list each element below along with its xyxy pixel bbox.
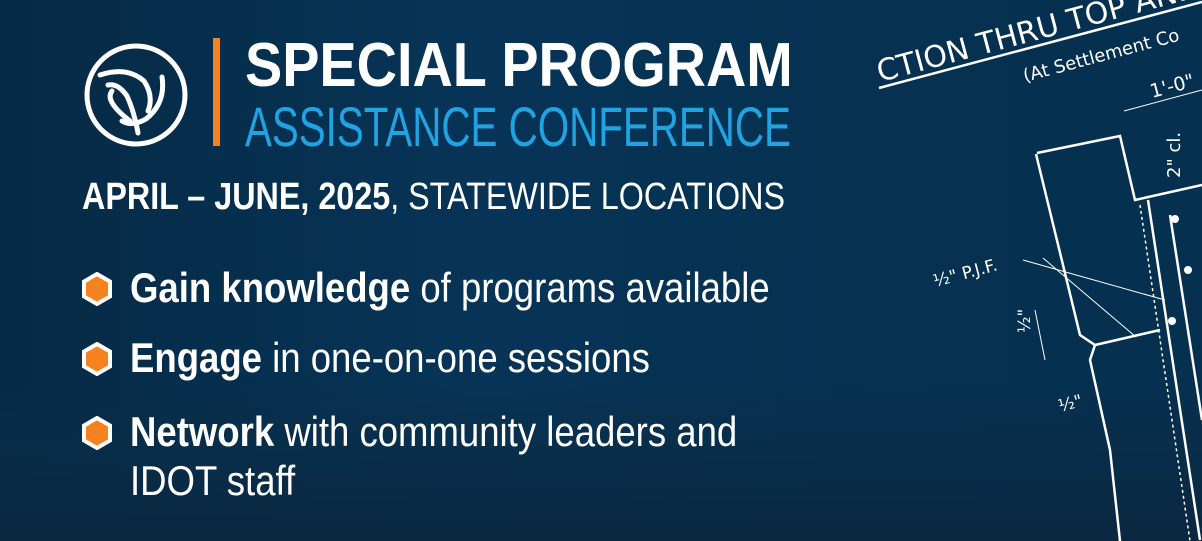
bullet 2: Engage in one-on-one sessions: [130, 334, 650, 381]
photo crowd area: [0, 380, 1202, 541]
bullet 1: Gain knowledge of programs available: [130, 264, 770, 311]
title: SPECIAL PROGRAM: [245, 31, 793, 100]
blueprint drawing: ½": [1015, 309, 1035, 333]
blueprint drawing: 2" cl.: [1164, 132, 1185, 178]
bullet 3: [82, 408, 737, 504]
blueprint drawing: (At Settlement Co: [1021, 25, 1182, 87]
date line: APRIL – JUNE, 2025, STATEWIDE LOCATIONS: [82, 176, 785, 218]
blueprint drawing: 1'-0": [1148, 70, 1197, 103]
logo: [84, 44, 188, 146]
bullet 3: Network with community leaders and: [130, 408, 737, 455]
title: [245, 31, 793, 158]
orange divider: [213, 38, 220, 146]
title: ASSISTANCE CONFERENCE: [245, 95, 791, 158]
bullet list: [82, 264, 770, 504]
bullet 3: IDOT staff: [130, 457, 295, 504]
blueprint drawing: ½" P.J.F.: [931, 256, 1000, 292]
blueprint drawing: ½": [1056, 391, 1085, 417]
